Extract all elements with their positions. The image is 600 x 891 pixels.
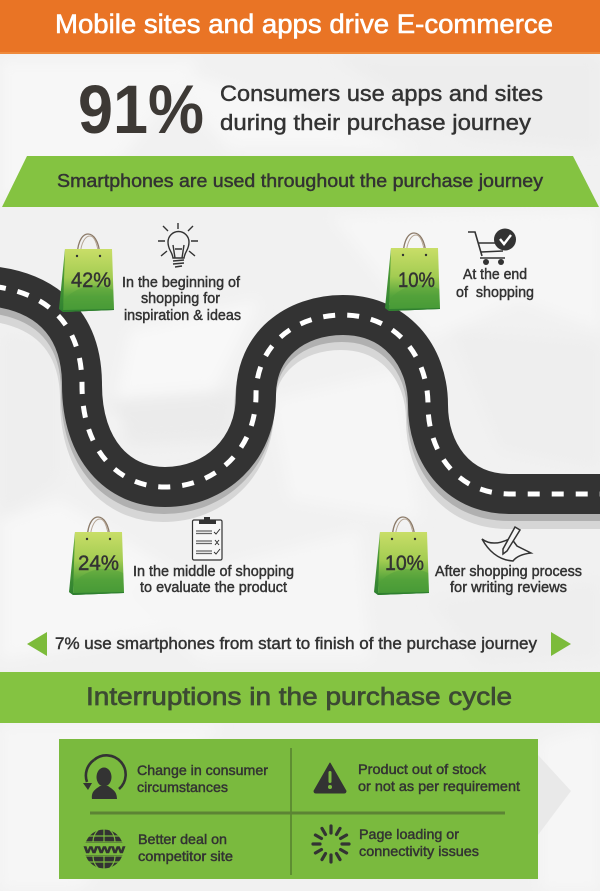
headline statistic: [78, 71, 543, 148]
stat: 24 percent: [69, 517, 294, 596]
text: connectivity issues: [359, 843, 479, 859]
cell: change in circumstances: [83, 755, 268, 799]
icon: light bulb: [158, 223, 198, 267]
heading: Interruptions in the purchase cycle: [86, 683, 512, 711]
description: At the end: [463, 267, 527, 283]
description: In the beginning of: [122, 275, 241, 291]
description: shopping for: [141, 291, 220, 307]
text: [359, 826, 479, 859]
text: Change in consumer: [137, 762, 268, 778]
description: [122, 275, 241, 324]
start to finish note: [27, 632, 571, 656]
icon: shopping bag: [385, 233, 440, 311]
description: [456, 267, 534, 301]
statistic description: [220, 81, 543, 135]
24 percent label: 24%: [78, 552, 119, 575]
text: [358, 761, 520, 794]
title: Mobile sites and apps drive E-commerce: [55, 9, 553, 39]
description: of shopping: [456, 285, 534, 301]
stat: 10 percent at the end: [385, 228, 534, 311]
icon: paper and pen: [482, 527, 531, 561]
icon: www globe: [82, 829, 126, 869]
description: to evaluate the product: [140, 580, 287, 596]
description: for writing reviews: [450, 580, 567, 596]
text: or not as per requirement: [358, 778, 520, 794]
stat: 42 percent: [59, 223, 241, 324]
42 percent label: 42%: [71, 269, 111, 292]
green trapezoid banner: [2, 156, 599, 207]
text: [137, 762, 268, 795]
banner text: Smartphones are used throughout the purchase journey: [57, 171, 543, 191]
statistic description: during their purchase journey: [220, 110, 532, 135]
right arrow: [551, 632, 571, 656]
winding road: [0, 286, 600, 509]
icon: shopping bag: [374, 517, 429, 595]
text: Better deal on: [138, 831, 227, 847]
interruptions heading band: [0, 672, 600, 723]
left arrow: [27, 632, 47, 656]
cell: page loading: [313, 826, 479, 862]
interruptions panel: [59, 739, 538, 879]
header banner: [0, 0, 600, 54]
icon: shopping bag: [69, 517, 124, 595]
10 percent label: 10%: [398, 269, 435, 292]
description: inspiration & ideas: [124, 308, 241, 324]
10 percent label: 10%: [385, 552, 424, 575]
icon: person with circular arrow: [83, 755, 126, 799]
text: Page loading or: [359, 826, 459, 842]
text: Product out of stock: [358, 761, 487, 777]
icon: clipboard: [192, 517, 222, 560]
text: [138, 831, 233, 864]
stat: 10 percent after shopping: [374, 517, 582, 596]
description: [435, 564, 582, 596]
icon: loading spinner: [313, 826, 349, 862]
91 percent figure: 91%: [78, 71, 204, 148]
text: competitor site: [138, 848, 233, 864]
note text: 7% use smartphones from start to finish of the purchase journey: [55, 635, 538, 653]
icon: warning triangle: [314, 763, 346, 793]
cell: better deal: [82, 829, 233, 869]
text: circumstances: [137, 779, 228, 795]
icon: shopping bag: [59, 234, 114, 312]
icon: cart with check: [468, 228, 516, 265]
statistic description: Consumers use apps and sites: [220, 81, 543, 106]
icon: www globe: www: [83, 842, 126, 856]
description: In the middle of shopping: [133, 564, 294, 580]
description: After shopping process: [435, 564, 582, 580]
cell: out of stock: [314, 761, 520, 794]
description: [133, 564, 294, 596]
